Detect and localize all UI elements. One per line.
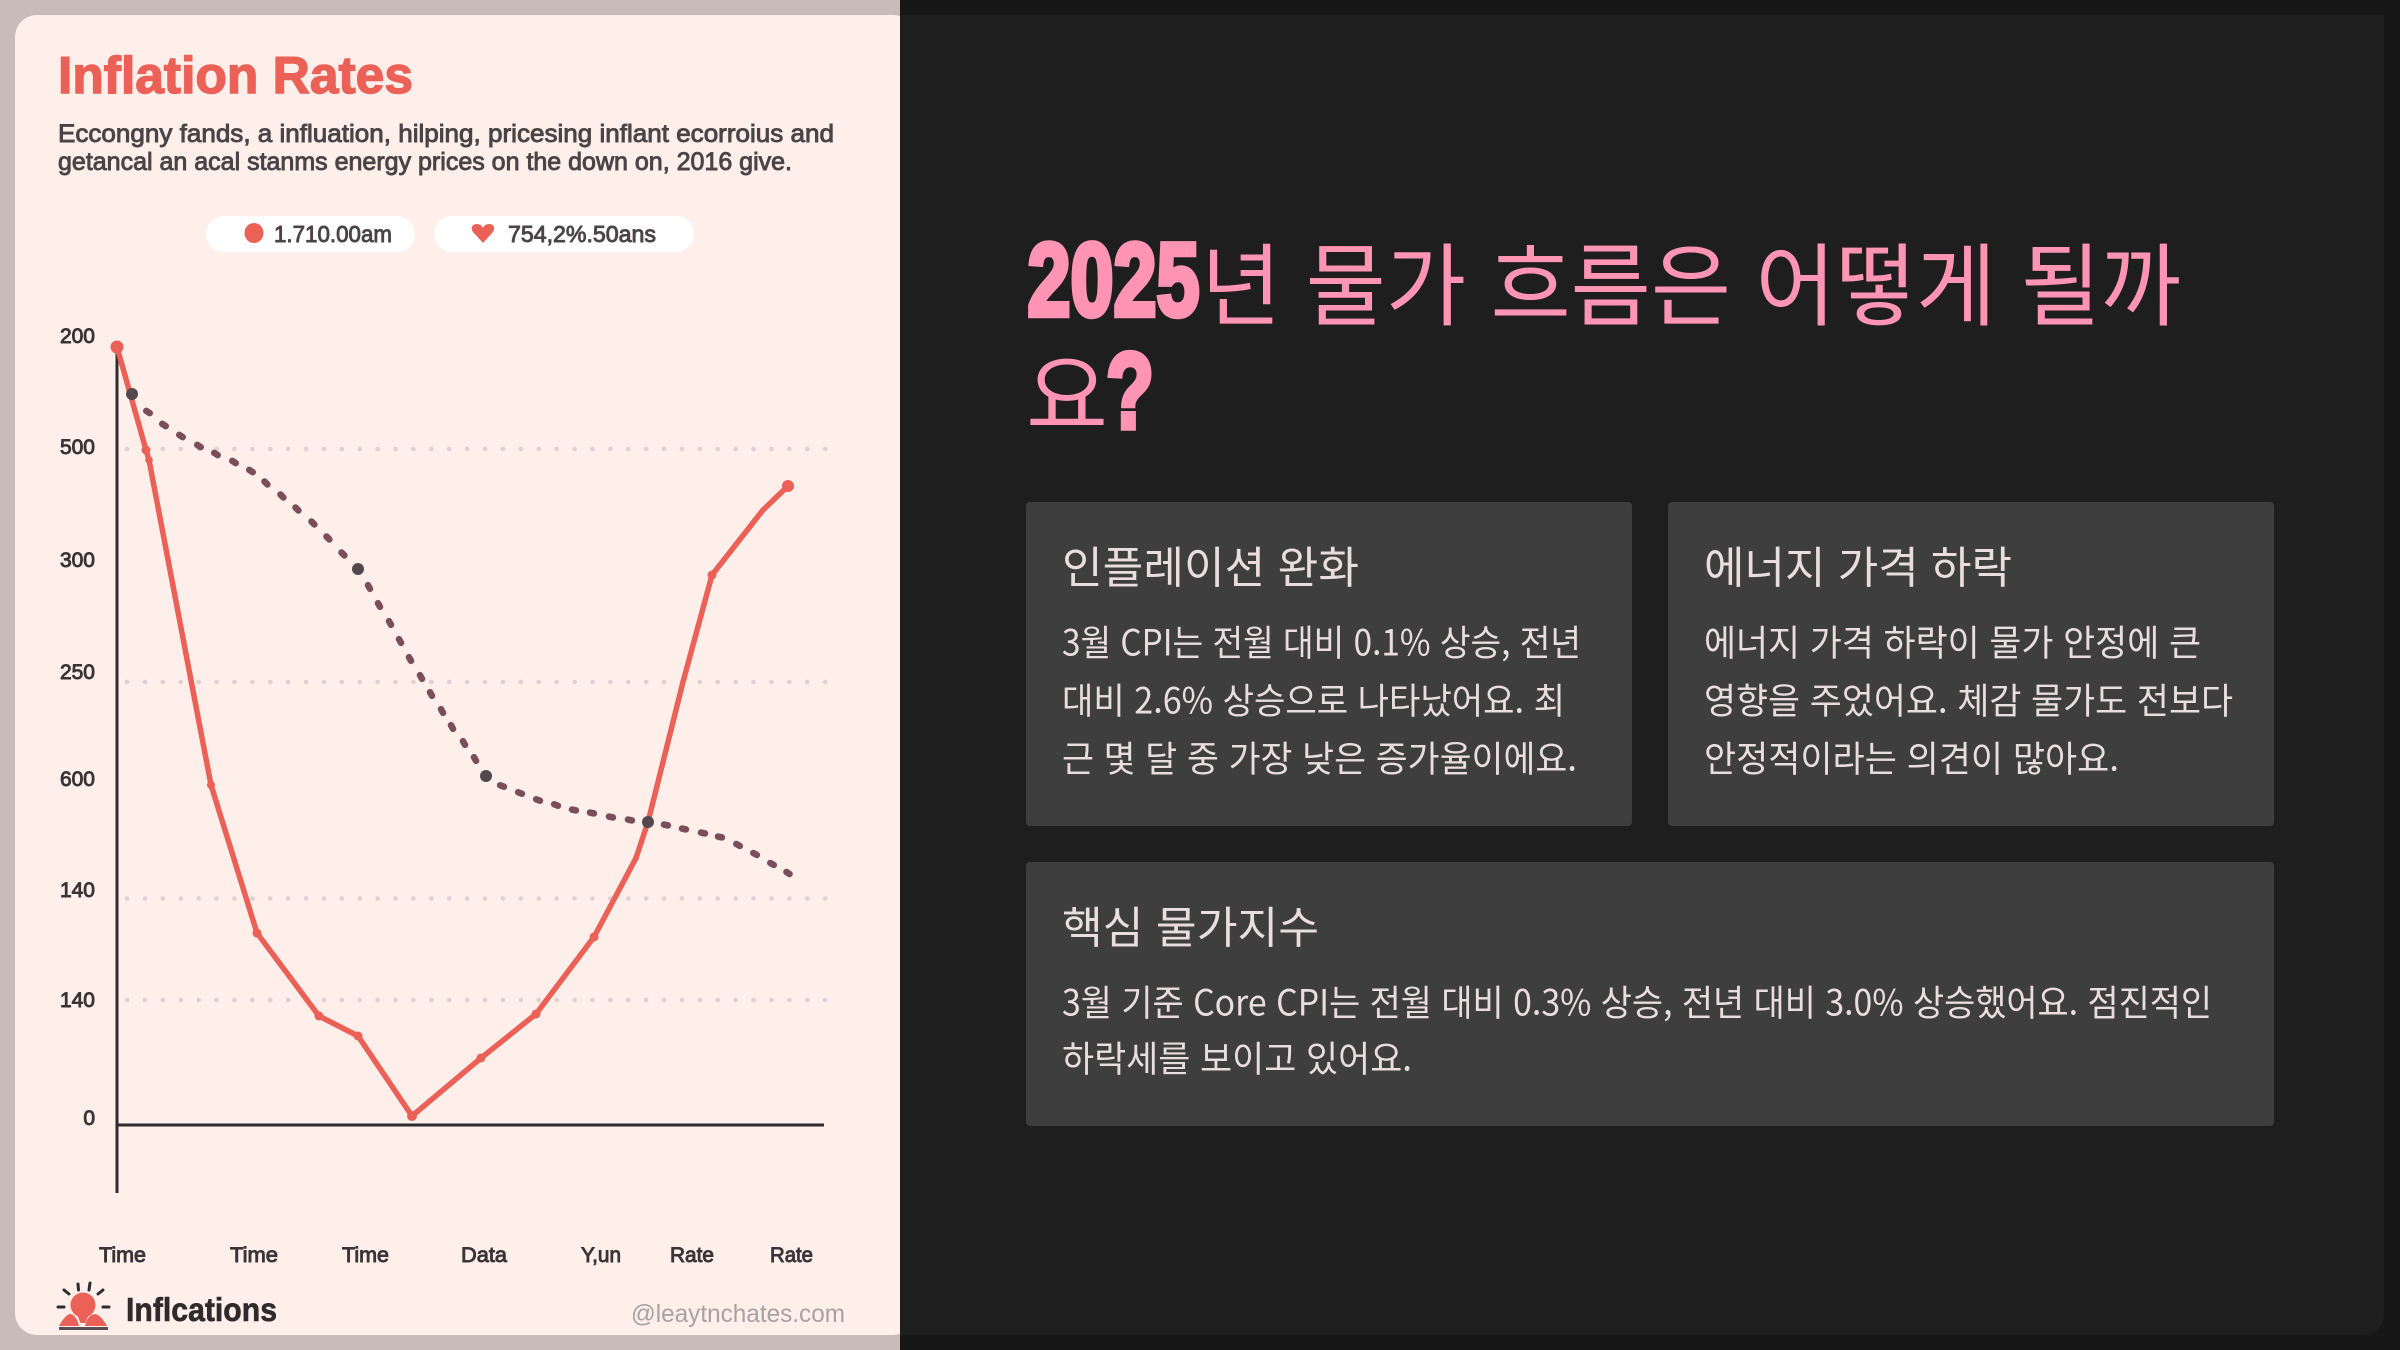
intro text	[58, 120, 834, 176]
y axis labels: 500	[60, 436, 95, 459]
brand name: Inflcations	[126, 1291, 277, 1328]
x axis labels: Data	[461, 1244, 507, 1267]
x axis labels: Time	[342, 1244, 389, 1267]
card body	[1704, 614, 2233, 782]
icon: sun logo	[58, 1283, 109, 1328]
card body: 3월 CPI는 전월 대비 0.1% 상승, 전년	[1062, 614, 1581, 666]
legend pill: dot series	[206, 216, 415, 252]
main heading: 요	[1026, 324, 1108, 454]
card: energy price decline	[1668, 502, 2274, 826]
x axis labels: Y,un	[581, 1244, 621, 1267]
card body	[1062, 614, 1581, 782]
intro text: getancal an acal stanms energy prices on the down on, 2016 give.	[58, 148, 792, 176]
x axis labels: Time	[230, 1244, 278, 1267]
y axis labels: 200	[60, 325, 95, 348]
y axis labels	[60, 325, 95, 1130]
card body: 에너지 가격 하락이 물가 안정에 큰	[1704, 614, 2201, 666]
panel: dark content	[900, 15, 2384, 1335]
title: Inflation Rates	[58, 47, 413, 105]
intro text: Eccongny fands, a influation, hilping, pricesing inflant ecorroius and	[58, 120, 834, 148]
main heading: 2025	[1028, 222, 1200, 338]
legend pill: heart series: 754,2%.50ans	[508, 221, 656, 247]
red series line	[110, 340, 794, 1121]
y axis labels: 0	[83, 1107, 95, 1130]
x axis labels: Time	[99, 1244, 146, 1267]
legend pill: heart series	[434, 216, 694, 252]
main heading	[1026, 214, 2181, 454]
card: inflation easing	[1026, 502, 1632, 826]
card body: 안정적이라는 의견이 많아요.	[1704, 730, 2119, 782]
dotted dark series line	[126, 388, 790, 874]
main heading: 년 물가 흐름은 어떻게 될까	[1201, 214, 2181, 344]
card body: 근 몇 달 중 가장 낮은 증가율이에요.	[1062, 730, 1577, 782]
card body: 대비 2.6% 상승으로 나타났어요. 최	[1062, 672, 1565, 724]
x axis labels: Rate	[770, 1244, 813, 1267]
card heading: 인플레이션 완화	[1062, 532, 1359, 596]
main heading: ?	[1106, 330, 1154, 451]
y axis labels: 140	[60, 989, 95, 1012]
x axis labels: Rate	[670, 1244, 714, 1267]
legend pill: dot series: 1.710.00am	[274, 221, 392, 247]
card body	[1062, 974, 2212, 1082]
x axis labels	[99, 1244, 813, 1267]
card: core price index	[1026, 862, 2274, 1126]
card body: 3월 기준 Core CPI는 전월 대비 0.3% 상승, 전년 대비 3.0% 상승했어요. 점진적인	[1062, 974, 2212, 1026]
y axis labels: 300	[60, 549, 95, 572]
y axis labels: 250	[60, 661, 95, 684]
card heading: 핵심 물가지수	[1062, 892, 1319, 956]
card body: 하락세를 보이고 있어요.	[1062, 1030, 1412, 1082]
card heading: 에너지 가격 하락	[1704, 532, 2012, 596]
panel: inflation rates chart card	[15, 15, 915, 1335]
line chart	[60, 325, 828, 1267]
website credit: @leaytnchates.com	[631, 1300, 845, 1328]
y axis labels: 140	[60, 879, 95, 902]
axes	[116, 347, 824, 1193]
card body: 영향을 주었어요. 체감 물가도 전보다	[1704, 672, 2233, 724]
y axis labels: 600	[60, 768, 95, 791]
